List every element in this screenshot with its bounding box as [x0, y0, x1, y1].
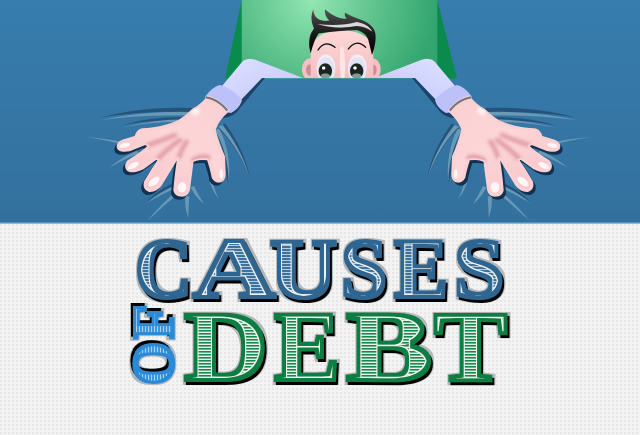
sleeve shadow right: [412, 78, 468, 118]
hand outline: [118, 97, 227, 195]
scratch marks left: [87, 108, 250, 221]
cuff edge right: [450, 97, 471, 111]
title word: DEBT: B: [346, 291, 432, 402]
title word: CAUSES: A: [193, 222, 275, 316]
scratch marks right: [427, 108, 590, 221]
nose shading: [340, 47, 345, 80]
title word: OF (rotated): F: [121, 305, 186, 339]
face: [311, 30, 373, 82]
eyebrows: [318, 43, 366, 50]
hand left: [116, 97, 227, 198]
green shirt: [225, 0, 457, 78]
cuff edge: [206, 97, 227, 111]
title word: DEBT: [184, 291, 507, 402]
sleeve right: [374, 59, 455, 101]
left arm and hand: [87, 59, 303, 221]
character head peeking over the table: [302, 9, 381, 82]
title word: CAUSES: E: [394, 222, 448, 316]
cuff left: [205, 85, 242, 113]
title word: CAUSES: U: [270, 222, 337, 316]
title word: DEBT: E: [274, 291, 340, 402]
hand shadow: [116, 133, 222, 198]
knuckle shading: [148, 106, 208, 160]
cuff right: [435, 85, 472, 113]
eyes: [316, 54, 367, 78]
title word: CAUSES: S: [341, 222, 387, 316]
title word: DEBT: T: [434, 291, 507, 402]
title word: CAUSES: S: [454, 222, 504, 316]
panel: dotted paper background: [0, 222, 640, 435]
title word: CAUSES: C: [135, 222, 192, 316]
hand outline right: [450, 97, 559, 195]
knuckle shading right: [469, 106, 529, 160]
title word: DEBT: D: [184, 291, 268, 402]
hand right: [450, 97, 561, 198]
right arm and hand: [374, 59, 590, 221]
ears: [302, 58, 381, 80]
title word: OF (rotated): [121, 305, 186, 385]
hand shadow right: [455, 133, 561, 198]
hair: [309, 9, 376, 55]
fingernails: [119, 142, 223, 193]
sleeve left: [222, 59, 303, 101]
title word: CAUSES: [135, 222, 504, 316]
sleeve shadow left: [209, 78, 265, 118]
fingernails right: [454, 142, 558, 193]
title word: OF (rotated): O: [121, 342, 186, 385]
panel: blue illustration background: [0, 0, 640, 222]
